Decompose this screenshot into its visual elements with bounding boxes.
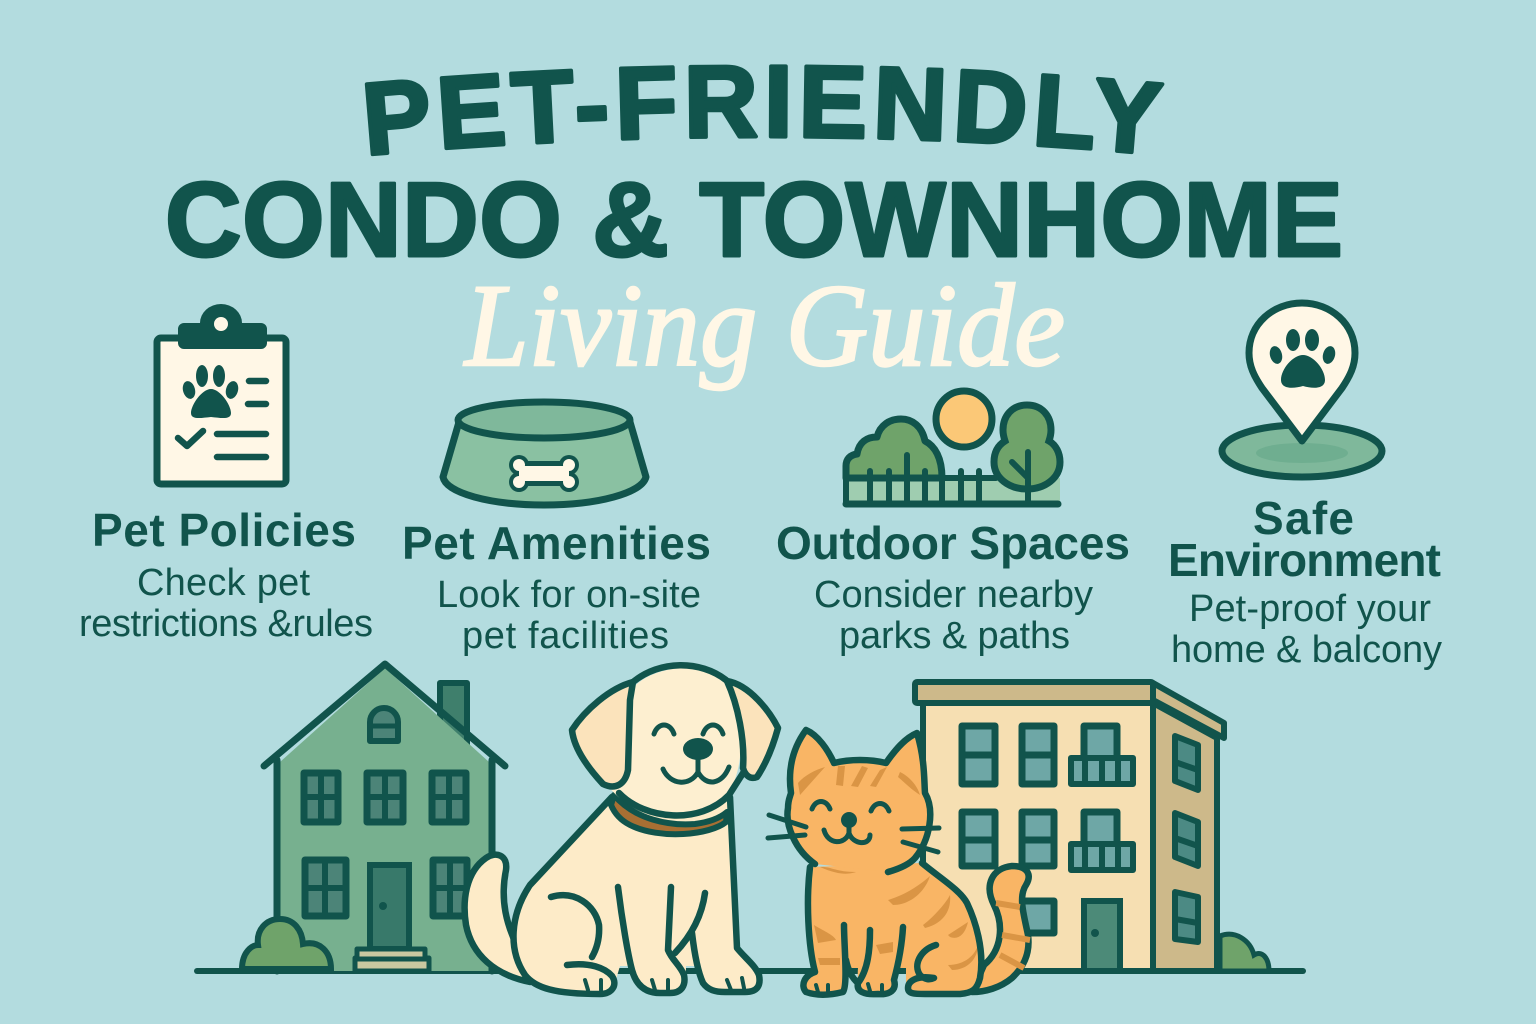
tail	[972, 866, 1029, 992]
windows	[304, 773, 467, 916]
text: policies description	[79, 562, 373, 645]
heading: Outdoor Spaces: Outdoor Spaces	[776, 517, 1130, 569]
text: policies description: restrictions &rules	[79, 603, 373, 645]
heading: Pet Policies: Pet Policies	[92, 504, 356, 556]
front windows	[962, 726, 1133, 933]
text: policies description: Check pet	[137, 562, 310, 604]
text: outdoor description: parks & paths	[839, 615, 1070, 657]
face	[654, 725, 729, 782]
apartment building illustration	[915, 682, 1269, 971]
body and leg outlines	[803, 863, 981, 995]
title: CONDO & TOWNHOME	[165, 161, 1343, 279]
icon: park with sun, trees and fence	[846, 391, 1060, 504]
head stripes	[798, 766, 920, 874]
icon: location pin with paw	[1222, 303, 1382, 477]
townhouse illustration	[242, 664, 505, 971]
panel: outdoor spaces	[776, 391, 1130, 657]
text: safety description: home & balcony	[1171, 629, 1442, 671]
door	[370, 865, 409, 949]
ground line	[197, 968, 1303, 974]
front steps	[355, 949, 429, 971]
text: outdoor description	[814, 574, 1093, 657]
side windows	[1175, 736, 1198, 942]
title: PET-FRIENDLY	[364, 64, 1164, 156]
text: outdoor description: Consider nearby	[814, 574, 1093, 616]
right bush	[1220, 934, 1269, 971]
attic window	[370, 708, 398, 741]
heading: Safe Environment: Environment	[1168, 534, 1441, 586]
body	[803, 863, 981, 995]
cat face	[812, 802, 889, 843]
icon: clipboard	[157, 304, 286, 484]
head	[610, 669, 740, 813]
title: Living Guide	[463, 260, 1065, 391]
panel: pet amenities	[402, 402, 711, 657]
heading: Safe Environment	[1168, 492, 1441, 586]
body	[514, 797, 760, 993]
walls	[923, 703, 1153, 971]
whiskers	[768, 815, 939, 852]
heading: Safe Environment: Safe	[1253, 492, 1354, 544]
cat illustration	[768, 730, 1030, 995]
panel: safe environment	[1168, 303, 1442, 671]
panel: pet policies	[79, 304, 373, 645]
tail	[465, 855, 530, 982]
chimney	[440, 683, 467, 745]
front door	[1084, 901, 1120, 971]
bush	[242, 919, 331, 969]
ears	[572, 682, 633, 786]
stripes	[814, 876, 978, 970]
head	[787, 730, 930, 872]
heading: Pet Amenities: Pet Amenities	[402, 517, 711, 569]
text: amenities description	[437, 574, 701, 657]
dog illustration	[465, 665, 778, 994]
text: amenities description: Look for on-site	[437, 574, 701, 616]
title	[165, 64, 1343, 392]
collar	[611, 795, 727, 834]
text: amenities description: pet facilities	[462, 615, 669, 657]
text: safety description	[1171, 588, 1442, 671]
icon: pet bowl	[443, 402, 646, 505]
text: safety description: Pet-proof your	[1189, 588, 1431, 630]
roof	[1153, 683, 1224, 738]
